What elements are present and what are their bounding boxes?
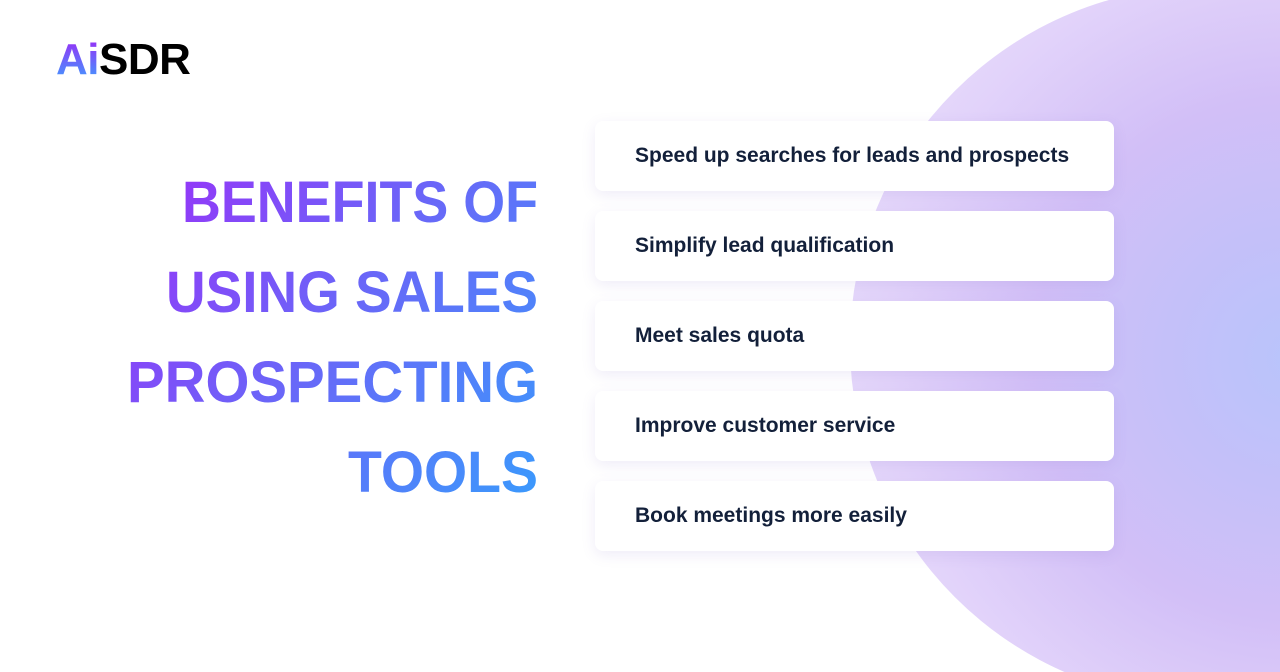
title: PROSPECTING xyxy=(127,350,538,415)
background circle xyxy=(850,0,1280,672)
card 1: Speed up searches for leads and prospects xyxy=(635,144,1069,167)
title: BENEFITS OF xyxy=(182,170,538,235)
card 2 xyxy=(595,211,1114,281)
card 3: Meet sales quota xyxy=(635,324,804,347)
logo: AiSDR xyxy=(56,35,190,84)
card 4: Improve customer service xyxy=(635,414,895,437)
title: USING SALES xyxy=(166,260,538,325)
card 5 xyxy=(595,481,1114,551)
card 4 xyxy=(595,391,1114,461)
card 2: Simplify lead qualification xyxy=(635,234,894,257)
title xyxy=(127,170,538,505)
card 3 xyxy=(595,301,1114,371)
card 5: Book meetings more easily xyxy=(635,504,907,527)
card 1 xyxy=(595,121,1114,191)
title: TOOLS xyxy=(348,440,538,505)
